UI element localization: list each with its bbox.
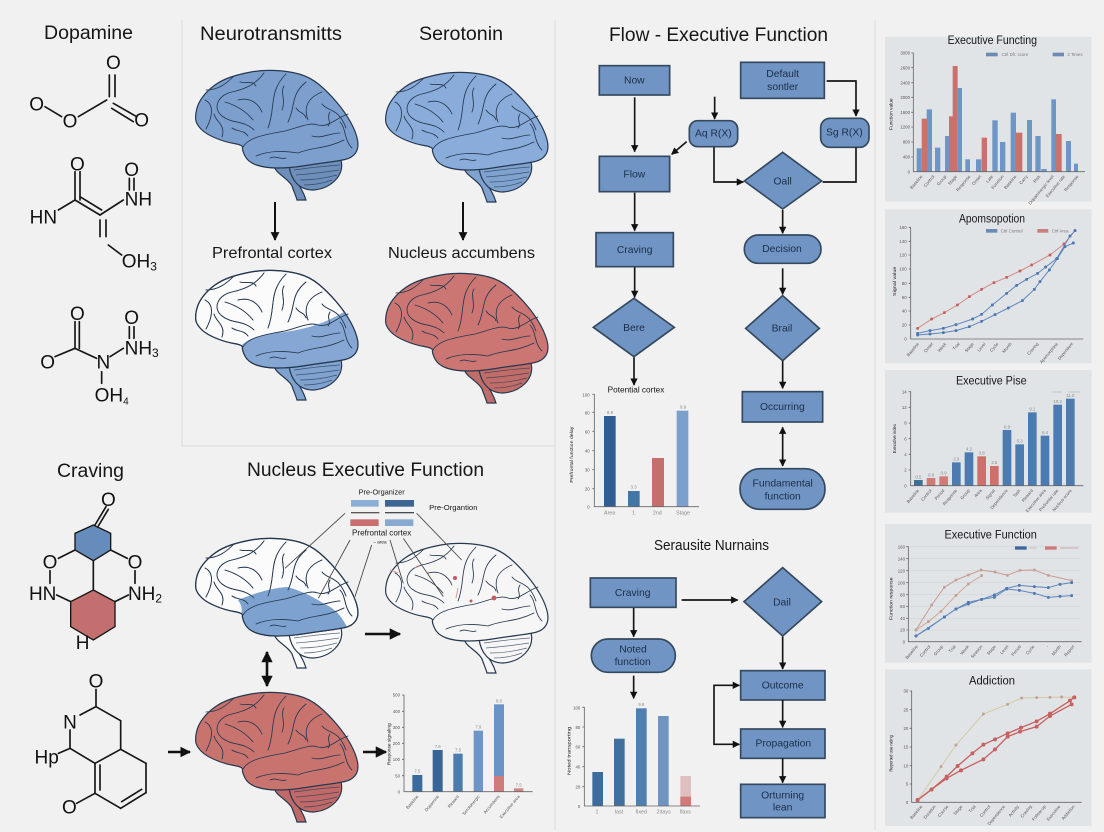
molecule: dopamine structures: O	[124, 308, 139, 329]
molecule: dopamine structures: HN	[30, 207, 57, 228]
chart: small bar chart below red brain arrow: 7.9	[475, 725, 482, 730]
flowchart: lower right column and second flow: Outcome	[762, 681, 804, 692]
panel: Executive Functing bar chart: 2000	[900, 95, 911, 100]
arrow: to nucleus accumbens	[462, 202, 464, 240]
molecule: craving structures: O	[62, 797, 77, 818]
panel: Addiction line chart: Addiction	[1060, 804, 1076, 821]
panel: Executive Pise bar chart: 5.3	[1017, 439, 1023, 444]
panel: Executive Pise bar chart: 6.9	[1004, 424, 1011, 429]
panel: Addiction line chart: Trial	[968, 804, 977, 814]
panel: Executive Function line chart: 100	[898, 580, 906, 585]
chart: small bar chart below red brain arrow: 300	[393, 725, 401, 730]
panel: Executive Functing bar chart: Response	[955, 174, 972, 192]
panel: Apomsopotion line chart: Onset	[923, 341, 935, 353]
panel: Executive Pise bar chart: 0.5	[915, 474, 922, 479]
panel: Apomsopotion line chart: Month	[1001, 341, 1013, 354]
panel: Executive Functing bar chart: Baseline	[1003, 174, 1018, 190]
brain: nucleus accumbens red	[386, 273, 548, 403]
panel: Executive Pise bar chart: Area	[973, 488, 983, 498]
chart: Potential cortex bar chart: 20	[585, 487, 590, 492]
panel: Addiction line chart: Course	[937, 804, 950, 818]
molecule: dopamine structures: 3	[152, 346, 159, 360]
panel: Executive Function line chart: Cycle	[1025, 644, 1036, 656]
panel: Executive Functing bar chart: Risk	[1032, 173, 1042, 184]
flowchart: lower right column and second flow: Dail	[773, 597, 791, 608]
chart: lower flow bar chart: 9.9	[638, 702, 645, 707]
chart: lower flow bar chart: 40	[576, 765, 581, 770]
panel: Executive Function line chart: Period	[1010, 644, 1022, 657]
panel: Executive Functing bar chart: Dopaminergic level	[1027, 174, 1055, 206]
legend: pre-organization callout with leader lines: Pre-Organtion	[429, 503, 477, 512]
panel: Executive Functing bar chart: 2400	[900, 80, 911, 85]
panel: Apomsopotion line chart: 60	[902, 295, 907, 300]
molecule: craving structures: O	[43, 552, 57, 573]
chart: Potential cortex bar chart: 60	[585, 429, 590, 434]
panel: Apomsopotion line chart: Cycle	[989, 341, 1000, 353]
panel: Executive Pise bar chart: 11.0	[1066, 393, 1075, 398]
molecule: craving structures: O	[89, 671, 103, 692]
panel: Executive Pise bar chart: Period	[934, 488, 946, 501]
molecule: craving structures: O	[128, 552, 142, 573]
panel: Apomsopotion line chart: Baseline	[906, 341, 920, 357]
panel: Executive Pise bar chart: 0.8	[928, 472, 935, 477]
chart: Potential cortex bar chart: 2nd	[653, 511, 662, 517]
panel: Executive Pise bar chart: 0	[904, 483, 907, 488]
title: Serausite Nurnains: Serausite Nurnains	[654, 537, 769, 554]
panel: Executive Functing bar chart: Carry	[1018, 173, 1029, 185]
molecule: dopamine structures: OH	[122, 252, 150, 273]
panel: Apomsopotion line chart: 100	[899, 267, 907, 272]
panel: Executive Functing bar chart: 0	[908, 169, 911, 174]
panel: Addiction line chart: 30	[904, 689, 909, 694]
panel: Executive Functing bar chart: Onset	[971, 173, 983, 186]
panel: Apomsopotion line chart: 120	[899, 253, 907, 258]
chart: Potential cortex bar chart: 0	[587, 505, 590, 510]
chart: small bar chart below red brain arrow: Response signaling	[387, 723, 392, 765]
molecule: dopamine structures: O	[106, 53, 121, 74]
chart: small bar chart below red brain arrow: Accumbens	[482, 794, 501, 815]
panel: Apomsopotion line chart: Dependent	[1057, 341, 1075, 361]
molecule: craving structures: HN	[29, 584, 56, 605]
panel: Addiction line chart: 0	[906, 800, 909, 805]
panel: Addiction line chart: Stage	[952, 804, 964, 816]
molecule: dopamine structures: 3	[150, 259, 157, 273]
panel: Executive Functing bar chart: Late	[985, 174, 994, 184]
panel: Executive Function line chart: Group	[933, 644, 944, 657]
chart: Potential cortex bar chart: 30	[585, 468, 590, 473]
panel: Executive Functing bar chart: Baseline	[909, 174, 924, 190]
chart: small bar chart below red brain arrow: Reward	[447, 794, 460, 809]
panel: Executive Functing bar chart: Function value	[889, 98, 894, 130]
flowchart: lower right column and second flow	[590, 392, 825, 818]
chart: Potential cortex bar chart: Prefrontal function delay	[569, 426, 575, 483]
chart: Potential cortex bar chart: 1	[632, 511, 635, 517]
chart: small bar chart below red brain arrow: 7.5	[516, 782, 522, 787]
molecule: craving structures: O	[101, 490, 116, 511]
flowchart: upper executive function flow: Now	[624, 76, 645, 87]
chart: small bar chart below red brain arrow: 0	[398, 789, 401, 794]
arrow: to white brain	[365, 633, 400, 635]
chart: small bar chart below red brain arrow: Serotonergic	[461, 793, 481, 816]
flowchart: lower right column and second flow: Craving	[615, 588, 651, 599]
panel: Addiction line chart: Duration	[922, 804, 937, 820]
panel: Apomsopotion line chart: 40	[902, 309, 907, 314]
panel: Executive Pise bar chart: 4.2	[966, 446, 973, 451]
legend: pre-organization callout with leader lines: Prefrontal cortex	[352, 527, 412, 537]
chart: lower flow bar chart: fixed	[636, 809, 647, 815]
panel: Executive Function line chart: 120	[898, 568, 906, 573]
title: Nucleus Executive Function: Nucleus Executive Function	[247, 460, 484, 481]
flowchart: lower right column and second flow: Fundamental	[753, 479, 813, 490]
panel: Executive Function line chart: Executive Function	[944, 527, 1037, 541]
panel: Executive Function line chart: Baseline	[904, 644, 919, 660]
title: Dopamine: Dopamine	[44, 23, 133, 44]
flowchart: upper executive function flow: Brail	[772, 324, 792, 335]
panel: Executive Functing bar chart: Executive rate	[1045, 174, 1066, 198]
panel: Executive Functing bar chart: Group	[936, 174, 948, 187]
brain: large red	[196, 692, 358, 822]
panel: Executive Pise bar chart: 6	[904, 436, 907, 441]
panel: Executive Function line chart: 0	[903, 639, 906, 644]
panel: Addiction line chart: 5	[906, 782, 909, 787]
panel: Executive Functing bar chart: Function	[990, 174, 1005, 190]
panel: Executive Pise bar chart: Reward	[1021, 488, 1034, 503]
title: Craving: Craving	[57, 461, 124, 482]
panel: Executive Pise bar chart: 0.9	[941, 471, 947, 476]
legend: pre-organization callout with leader lines: – area	[373, 539, 387, 544]
panel: Executive Pise bar chart: 6.4	[1042, 430, 1049, 435]
flowchart: upper executive function flow: Oall	[773, 177, 792, 188]
panel: Executive Pise bar chart: Nucleus score	[1051, 488, 1073, 512]
flowchart: upper executive function flow: sontler	[767, 82, 799, 93]
panel: Executive Functing bar chart: 1600	[900, 110, 911, 115]
panel: Executive Function line chart: -	[1045, 644, 1050, 648]
panel: Executive Pise bar chart: Baseline	[906, 488, 920, 504]
panel: Executive Pise bar chart: 14	[902, 389, 907, 394]
panel: Addiction line chart: Follow-up	[1031, 804, 1047, 822]
panel: Executive Functing bar chart: Response	[1063, 174, 1080, 192]
panel: Executive Pise bar chart: 9.1	[1029, 407, 1036, 412]
molecule: craving structures: H	[76, 633, 90, 654]
flowchart: lower right column and second flow: function	[615, 657, 651, 668]
panel: Executive Functing bar chart: Control	[923, 174, 935, 188]
chart: small bar chart below red brain arrow: 7.5	[414, 769, 421, 774]
panel: Apomsopotion line chart: Craving	[1026, 341, 1040, 356]
chart: lower flow bar chart: 1	[596, 809, 599, 815]
panel: Executive Function line chart	[885, 524, 1092, 663]
panel: Apomsopotion line chart: 160	[899, 225, 907, 230]
molecule: dopamine structures: NH	[125, 190, 152, 211]
flowchart: upper executive function flow: Sg R(X)	[826, 127, 863, 138]
panel: Executive Pise bar chart: 4	[904, 452, 907, 457]
flowchart: upper executive function flow	[593, 62, 869, 388]
panel: Apomsopotion line chart: Level	[976, 341, 987, 353]
panel: Executive Function line chart: Trial	[948, 644, 957, 654]
flowchart: upper executive function flow: Decision	[762, 244, 802, 255]
panel: Executive Function line chart: Control	[919, 644, 931, 658]
molecule: dopamine structures: O	[124, 160, 139, 181]
chart: small bar chart below red brain arrow: Executive area	[499, 794, 521, 819]
panel: Addiction line chart: Reported use rating	[889, 735, 895, 772]
brain: blue neurotransmitter	[196, 70, 358, 200]
molecule: dopamine structures: O	[134, 111, 149, 132]
chart: small bar chart below red brain arrow: 50	[395, 773, 401, 778]
molecule: craving structures	[29, 490, 162, 818]
panel: Executive Functing bar chart: 400	[903, 155, 911, 160]
molecule: dopamine structures: O	[40, 352, 55, 373]
chart: Potential cortex bar chart: 3.3	[631, 485, 637, 490]
panel: Executive Function line chart: 20	[900, 628, 906, 633]
panel: Executive Pise bar chart: Control	[920, 488, 933, 502]
panel: Addiction line chart	[885, 669, 1092, 826]
panel: Executive Function line chart: Level	[999, 644, 1009, 655]
panel: Executive Function line chart: Report	[1063, 643, 1076, 657]
panel: Addiction line chart: Control	[979, 804, 991, 818]
panel: Apomsopotion line chart: 20	[902, 323, 907, 328]
panel: Executive Pise bar chart: 8	[904, 421, 907, 426]
panel: Executive Function line chart: Session	[970, 644, 984, 659]
panel: Executive Function line chart: Week	[959, 643, 971, 656]
panel: Executive Functing bar chart: Executive Functing	[948, 33, 1037, 47]
panel: Executive Pise bar chart: 2.9	[953, 456, 960, 461]
brain: serotonin blue	[386, 72, 548, 202]
flowchart: upper executive function flow: Aq R(X)	[695, 128, 732, 139]
title: Serotonin: Serotonin	[419, 24, 503, 45]
chart: lower flow bar chart: 60	[576, 745, 581, 750]
panel: Apomsopotion line chart: Apomsopotion	[959, 212, 1025, 226]
chart: lower flow bar chart: 0	[578, 804, 581, 809]
chart: small bar chart below red brain arrow: 100	[393, 757, 401, 762]
chart: lower flow bar chart: Noted transporting	[566, 726, 572, 775]
panel: Executive Pise bar chart: Dependence	[989, 488, 1009, 510]
panel: Executive Pise bar chart	[885, 370, 1092, 513]
panel: Executive Functing bar chart	[885, 33, 1092, 206]
panel: Apomsopotion line chart: 80	[902, 281, 907, 286]
molecule: dopamine structures: N	[96, 352, 110, 373]
panel: Executive Function line chart: 80	[900, 592, 906, 597]
chart: lower flow bar chart: 2days	[657, 809, 671, 815]
molecule: dopamine structures: 4	[123, 396, 129, 407]
flowchart: lower right column and second flow: lean	[773, 803, 793, 814]
panel: Executive Functing bar chart: Stage	[947, 174, 958, 186]
chart: Potential cortex bar chart: 8.8	[607, 410, 614, 415]
arrow: to small bar chart	[363, 751, 386, 753]
flowchart: lower right column and second flow: function	[765, 491, 801, 502]
label: Nucleus accumbens: Nucleus accumbens	[388, 245, 535, 262]
panel: Executive Functing bar chart: 800	[903, 140, 911, 145]
panel: Apomsopotion line chart: 140	[899, 239, 907, 244]
chart: small bar chart below red brain arrow: 7.8	[435, 744, 441, 749]
chart: small bar chart below red brain arrow: 7.5	[455, 748, 462, 753]
panel: Executive Pise bar chart: Response	[942, 488, 958, 506]
chart: small bar chart below red brain arrow: 500	[393, 693, 401, 698]
brain: white with blue temporal lobe	[196, 538, 358, 668]
panel: Executive Pise bar chart: 2	[904, 468, 907, 473]
chart: lower flow bar chart: last	[615, 809, 624, 815]
panel: Addiction line chart: 25	[904, 707, 909, 712]
molecule: dopamine structures: O	[70, 304, 85, 325]
flowchart: upper executive function flow: Bere	[623, 323, 645, 334]
flowchart: lower right column and second flow: Orturning	[761, 790, 804, 801]
panel: Executive Pise bar chart: Task	[1012, 487, 1022, 498]
molecule: dopamine structures	[29, 53, 159, 407]
panel: Apomsopotion line chart: Stage	[964, 341, 975, 353]
panel: Executive Pise bar chart: Group	[959, 488, 971, 501]
chart: Potential cortex bar chart	[569, 386, 699, 517]
panel: Executive Functing bar chart: 3000	[900, 51, 911, 56]
panel: Executive Function line chart: 40	[900, 616, 906, 621]
panel: Executive Pise bar chart: Prefrontal rate	[1038, 488, 1060, 512]
panel: Executive Function line chart: Function response	[889, 577, 895, 620]
arrow: to prefrontal cortex	[274, 202, 276, 240]
arrow: molecule to red brain	[168, 751, 190, 753]
panel: Addiction line chart: 15	[904, 745, 909, 750]
panel: Executive Function line chart: 140	[898, 556, 906, 561]
flowchart: upper executive function flow: Flow	[623, 169, 646, 180]
chart: Potential cortex bar chart: 40	[585, 449, 590, 454]
panel: Apomsopotion line chart: 0	[904, 337, 907, 342]
molecule: craving structures: N	[63, 712, 77, 733]
label: Prefrontal cortex: Prefrontal cortex	[212, 245, 332, 262]
panel: Addiction line chart: Craving	[1019, 804, 1033, 819]
chart: small bar chart below red brain arrow: 8.0	[496, 698, 503, 703]
panel: Executive Function line chart: 160	[898, 544, 906, 549]
panel: Executive Functing bar chart: Ctrl Dfr. score	[1002, 52, 1029, 57]
chart: small bar chart below red brain arrow	[387, 693, 533, 819]
flowchart: upper executive function flow: Craving	[617, 245, 653, 256]
panel: Apomsopotion line chart	[885, 209, 1092, 364]
chart: small bar chart below red brain arrow: Dopamine	[424, 794, 440, 812]
panel: Apomsopotion line chart: Ctrl Area	[1052, 228, 1069, 233]
molecule: craving structures: NH	[128, 584, 155, 605]
panel: Executive Pise bar chart: Executive Pise	[956, 373, 1027, 387]
chart: Potential cortex bar chart: 100	[582, 392, 590, 397]
molecule: dopamine structures: OH	[95, 386, 123, 407]
panel: Addiction line chart: 20	[904, 726, 909, 731]
panel: Apomsopotion line chart: Apomorphine	[1039, 341, 1059, 364]
flowchart: upper executive function flow: Default	[766, 69, 799, 80]
panel: Executive Function line chart: Month	[1051, 644, 1062, 657]
chart: small bar chart below red brain arrow: Baseline	[405, 794, 420, 810]
flowchart: lower right column and second flow: Occurring	[760, 402, 805, 413]
molecule: dopamine structures: O	[29, 95, 44, 116]
brain: prefrontal white with blue base	[196, 270, 362, 400]
chart: Potential cortex bar chart: Potential cortex	[608, 386, 664, 395]
title: Neurotransmitts: Neurotransmitts	[200, 24, 342, 45]
legend: pre-organization callout with leader lines: Pre-Organizer	[359, 490, 405, 497]
panel: Addiction line chart: Executive	[1046, 804, 1062, 822]
arrow: double vertical between brains	[266, 652, 268, 686]
legend: pre-organization callout with leader lines	[285, 490, 477, 598]
flowchart: lower right column and second flow: Noted	[619, 645, 647, 656]
flowchart: lower right column and second flow: Propagation	[755, 739, 811, 750]
panel: Executive Functing bar chart: 2 Times	[1067, 52, 1082, 57]
chart: Potential cortex bar chart: Stage	[676, 511, 690, 517]
chart: lower flow bar chart: 100	[573, 706, 581, 711]
molecule: dopamine structures: O	[63, 112, 77, 133]
panel: Addiction line chart: Activity	[1007, 803, 1021, 818]
chart: lower flow bar chart	[566, 702, 700, 815]
panel: Apomsopotion line chart: Ctrl Control	[1001, 228, 1023, 233]
panel: Addiction line chart: 10	[904, 763, 909, 768]
panel: Apomsopotion line chart: Week	[937, 341, 948, 353]
panel: Executive Functing bar chart: 2600	[900, 65, 911, 70]
panel: Executive Pise bar chart: Executive index	[892, 423, 897, 453]
chart: small bar chart below red brain arrow: 400	[393, 709, 401, 714]
chart: small bar chart below red brain arrow: 200	[393, 741, 401, 746]
panel: Executive Pise bar chart: 3.8	[979, 450, 985, 455]
chart: Potential cortex bar chart: 80	[585, 410, 590, 415]
panel: Addiction line chart: Addiction	[969, 673, 1015, 687]
panel: Executive Pise bar chart: 2.5	[991, 460, 998, 465]
chart: lower flow bar chart: 20	[576, 785, 581, 790]
panel: Executive Pise bar chart: 12	[902, 405, 907, 410]
chart: Potential cortex bar chart: Area	[604, 511, 615, 517]
brain: white with red spots	[386, 543, 548, 673]
chart: Potential cortex bar chart: 9.9	[680, 405, 687, 410]
panel: Addiction line chart: Dependence	[986, 804, 1006, 826]
panel: Apomsopotion line chart: Trial	[952, 341, 961, 351]
panel: Apomsopotion line chart: Signal value	[892, 266, 897, 296]
chart: lower flow bar chart: flaxs	[680, 809, 691, 815]
panel: Executive Pise bar chart: Signal	[985, 488, 996, 501]
title: Flow - Executive Function: Flow - Executive Function	[609, 25, 828, 46]
panel: Executive Function line chart: Stage	[986, 644, 997, 656]
molecule: dopamine structures: O	[70, 155, 85, 176]
molecule: dopamine structures: NH	[125, 338, 152, 359]
molecule: craving structures: Hp	[35, 747, 59, 768]
molecule: craving structures: 2	[155, 592, 162, 606]
panel: Executive Functing bar chart: 1200	[900, 125, 911, 130]
panel: Executive Pise bar chart: Executive area	[1025, 488, 1047, 513]
panel: Addiction line chart: Baseline	[909, 804, 924, 820]
panel: Executive Pise bar chart: 10.2	[1053, 399, 1062, 404]
panel: Executive Function line chart: 60	[900, 604, 906, 609]
chart: lower flow bar chart: 80	[576, 725, 581, 730]
